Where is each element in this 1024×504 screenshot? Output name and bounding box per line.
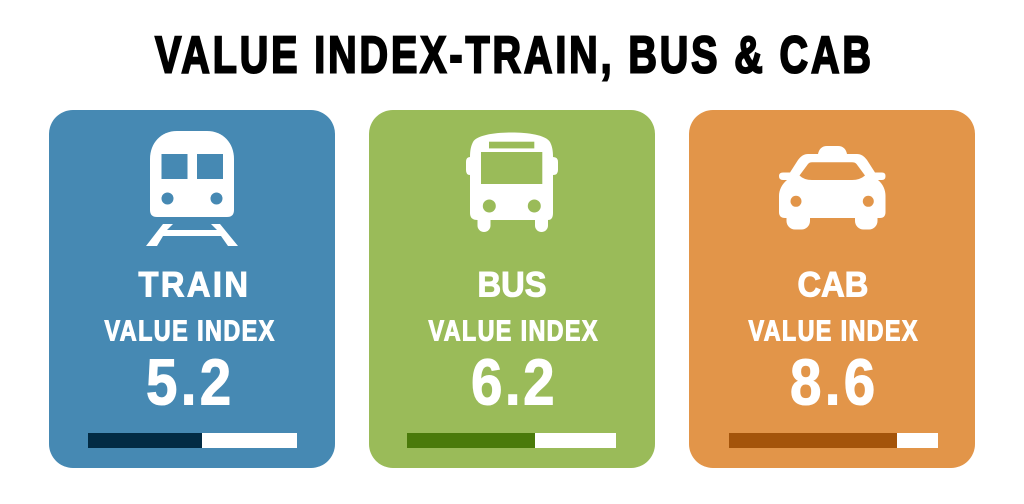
- bus heading: BUS: [478, 265, 547, 305]
- train value label: VALUE INDEX: [104, 314, 275, 347]
- panel: cab: [689, 110, 975, 468]
- bus value number: 6.2: [471, 346, 555, 418]
- train card background: [49, 110, 335, 468]
- panel: train: [49, 110, 335, 468]
- cab value label: VALUE INDEX: [748, 314, 918, 347]
- train value number: 5.2: [146, 346, 231, 418]
- bus value label: VALUE INDEX: [428, 314, 598, 347]
- bus card background: [369, 110, 655, 468]
- cab heading: CAB: [798, 265, 868, 305]
- train value bar: [88, 433, 297, 448]
- bus value bar: [407, 433, 616, 448]
- cab value bar: [729, 433, 938, 448]
- title: VALUE INDEX-TRAIN, BUS & CAB: [155, 25, 871, 84]
- cab value number: 8.6: [790, 346, 875, 418]
- cab card background: [689, 110, 975, 468]
- icon: train: [146, 131, 238, 246]
- panel: bus: [369, 110, 655, 468]
- train heading: TRAIN: [138, 265, 248, 305]
- icon: bus: [466, 132, 558, 232]
- icon: cab: [779, 146, 886, 230]
